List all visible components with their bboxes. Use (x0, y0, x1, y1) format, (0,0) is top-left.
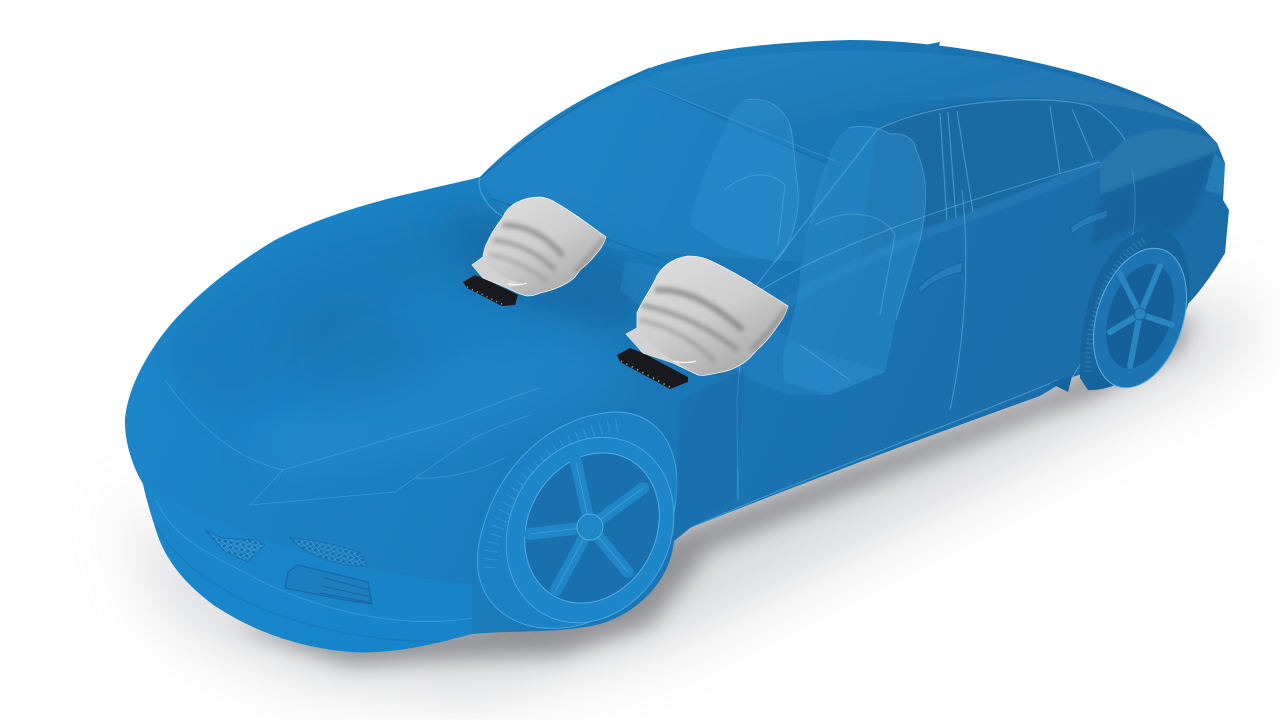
left airbag module (463, 275, 518, 306)
ground shadow (120, 290, 1250, 700)
right airbag module (617, 348, 688, 389)
side windows (860, 98, 1125, 260)
hood shading (185, 202, 645, 394)
door lines and handles (690, 130, 1133, 528)
right airbag (626, 256, 788, 375)
left airbag (472, 197, 606, 296)
seat edges (725, 99, 926, 380)
rear wheel (1050, 228, 1203, 400)
seats (620, 99, 926, 395)
car body silhouette (125, 40, 1229, 652)
hood and headlight lines (165, 178, 540, 505)
front bumper and grille (143, 370, 745, 652)
windshield and roof (480, 50, 1200, 262)
front wheel (474, 408, 706, 652)
rear quarter panel shading (922, 130, 1225, 242)
